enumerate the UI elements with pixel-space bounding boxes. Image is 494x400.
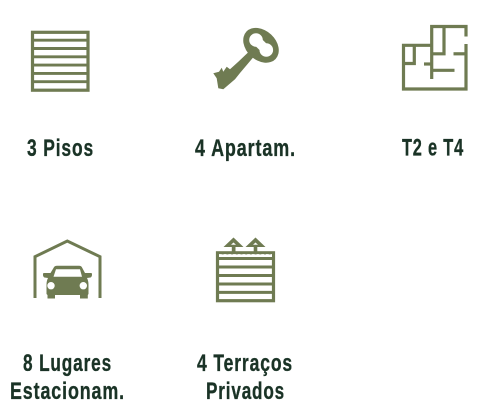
- label: 8 Lugares Estacionam.: 8 Lugares: [23, 350, 112, 377]
- label: 4 Apartam.: 4 Apartam.: [195, 135, 296, 162]
- icon: building floors: [32, 32, 88, 90]
- label: 4 Terraços Privados: [197, 350, 293, 400]
- icon: garage with car: [35, 241, 100, 298]
- label: 3 Pisos: 3 Pisos: [27, 135, 94, 162]
- label: 8 Lugares Estacionam.: [10, 350, 125, 400]
- icon: floor plan: [404, 26, 466, 89]
- label: 4 Terraços Privados: 4 Terraços: [197, 350, 293, 377]
- icon: private terraces: [217, 238, 274, 301]
- icon: key: [213, 21, 286, 89]
- label: T2 e T4: T2 e T4: [402, 134, 464, 162]
